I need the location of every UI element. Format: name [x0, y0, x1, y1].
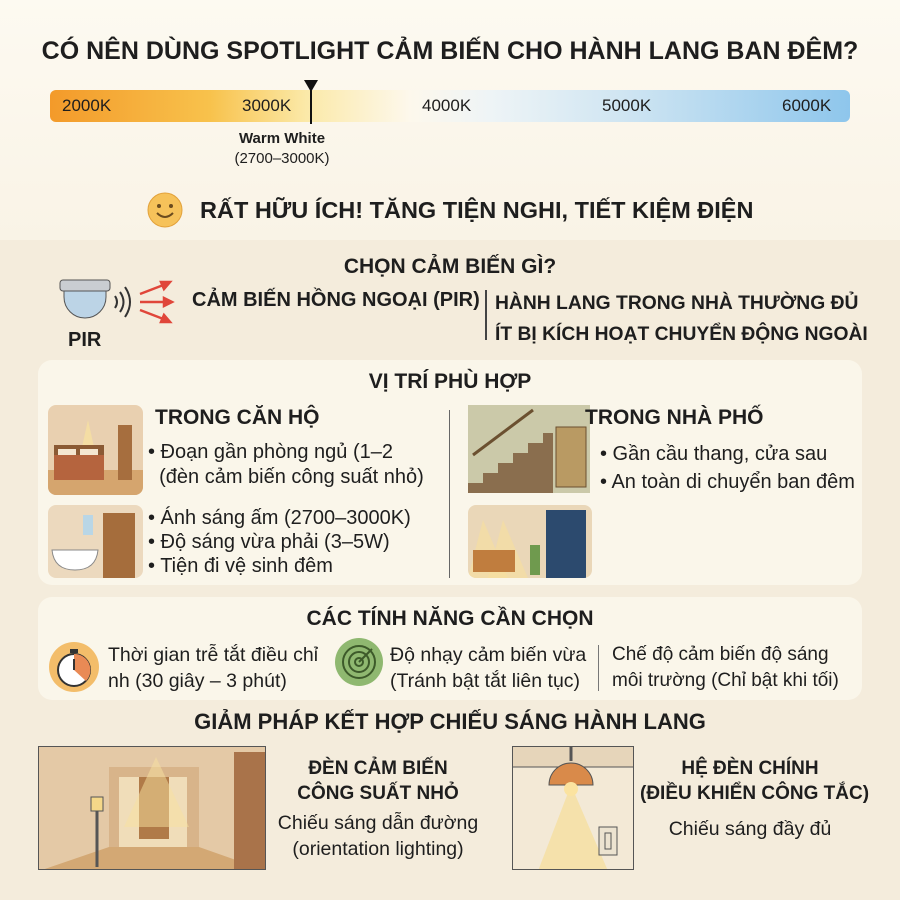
bullets: townhouse: • An toàn di chuyển ban đêm: [600, 471, 855, 493]
image: bedroom: [48, 405, 143, 495]
warm white label: [234, 130, 330, 167]
text: small sensor lights: [297, 756, 459, 804]
panel: features: [38, 597, 862, 700]
warm white label: (2700–3000K): [234, 150, 330, 167]
feature: delay: [108, 644, 318, 692]
bullets: townhouse: [600, 443, 855, 493]
marker: [304, 80, 318, 124]
color temperature bar: [50, 90, 850, 122]
icon: smiley: [148, 192, 182, 228]
color temperature bar: 5000K: [602, 96, 651, 115]
feature: ambient light: Chế độ cảm biến độ sáng: [612, 644, 829, 665]
note: HÀNH LANG TRONG NHÀ THƯỜNG ĐỦ: [495, 293, 858, 314]
icon: PIR sensor: [60, 280, 175, 350]
image: hallway: [38, 746, 266, 870]
bullets: apartment 2: • Tiện đi vệ sinh đêm: [148, 555, 333, 577]
heading: combined solution: GIẢM PHÁP KẾT HỢP CHIẾU SÁNG HÀNH LANG: [194, 709, 706, 734]
text: Chiếu sáng dẫn đường: [278, 812, 478, 834]
feature: delay: Thời gian trễ tắt điều chỉ: [108, 644, 318, 666]
text: (orientation lighting): [292, 838, 464, 860]
text: main lights: (ĐIỀU KHIỂN CÔNG TẮC): [640, 783, 869, 804]
feature: sensitivity: [390, 644, 586, 692]
heading: CÁC TÍNH NĂNG CẦN CHỌN: [306, 607, 594, 630]
feature: delay: nh (30 giây – 3 phút): [108, 670, 287, 692]
heading: townhouse: TRONG NHÀ PHỐ: [585, 406, 764, 429]
headline: RẤT HỮU ÍCH! TĂNG TIỆN NGHI, TIẾT KIỆM ĐIỆN: [200, 197, 753, 223]
section: choose sensor: [60, 254, 868, 350]
feature: sensitivity: Độ nhạy cảm biến vừa: [390, 644, 586, 666]
bullets: apartment: (đèn cảm biến công suất nhỏ): [159, 466, 424, 488]
bullets: apartment: • Đoạn gần phòng ngủ (1–2: [148, 441, 393, 463]
image: pendant lamp with switch: [512, 746, 634, 870]
heading: apartment: TRONG CĂN HỘ: [155, 406, 320, 429]
warm white label: Warm White: [239, 130, 325, 147]
icon: timer: [49, 642, 99, 692]
note: ÍT BỊ KÍCH HOẠT CHUYỂN ĐỘNG NGOÀI: [495, 324, 868, 345]
feature: ambient light: [612, 644, 839, 691]
bullets: apartment 2: [148, 506, 411, 577]
heading: VỊ TRÍ PHÙ HỢP: [369, 370, 531, 393]
icon: radar: [335, 638, 383, 686]
heading: CHỌN CẢM BIẾN GÌ?: [344, 255, 556, 278]
bullets: apartment 2: • Độ sáng vừa phải (3–5W): [148, 531, 390, 553]
text: small sensor lights: ĐÈN CẢM BIẾN: [308, 758, 448, 779]
color temperature bar: 6000K: [782, 96, 831, 115]
note: [495, 292, 868, 345]
text: small sensor lights: CÔNG SUẤT NHỎ: [297, 783, 459, 804]
image: stairs: [468, 405, 590, 493]
color temperature bar: 2000K: [62, 96, 111, 115]
panel: locations: [38, 360, 862, 585]
image: bathroom: [48, 505, 143, 578]
text: main lights: HỆ ĐÈN CHÍNH: [681, 758, 819, 779]
image: living room: [468, 505, 592, 578]
text: Chiếu sáng đầy đủ: [669, 818, 831, 840]
bullets: apartment: [148, 441, 424, 488]
color temperature bar: 4000K: [422, 96, 471, 115]
title: CÓ NÊN DÙNG SPOTLIGHT CẢM BIẾN CHO HÀNH LANG BAN ĐÊM?: [42, 37, 858, 65]
text: main lights: [640, 756, 869, 804]
color temperature bar: 3000K: [242, 96, 291, 115]
feature: sensitivity: (Tránh bật tắt liên tục): [390, 670, 580, 692]
feature: ambient light: môi trường (Chỉ bật khi tối): [612, 670, 839, 691]
bullets: townhouse: • Gần cầu thang, cửa sau: [600, 443, 827, 465]
bullets: apartment 2: • Ánh sáng ấm (2700–3000K): [148, 507, 411, 529]
sensor type: CẢM BIẾN HỒNG NGOẠI (PIR): [192, 289, 480, 311]
